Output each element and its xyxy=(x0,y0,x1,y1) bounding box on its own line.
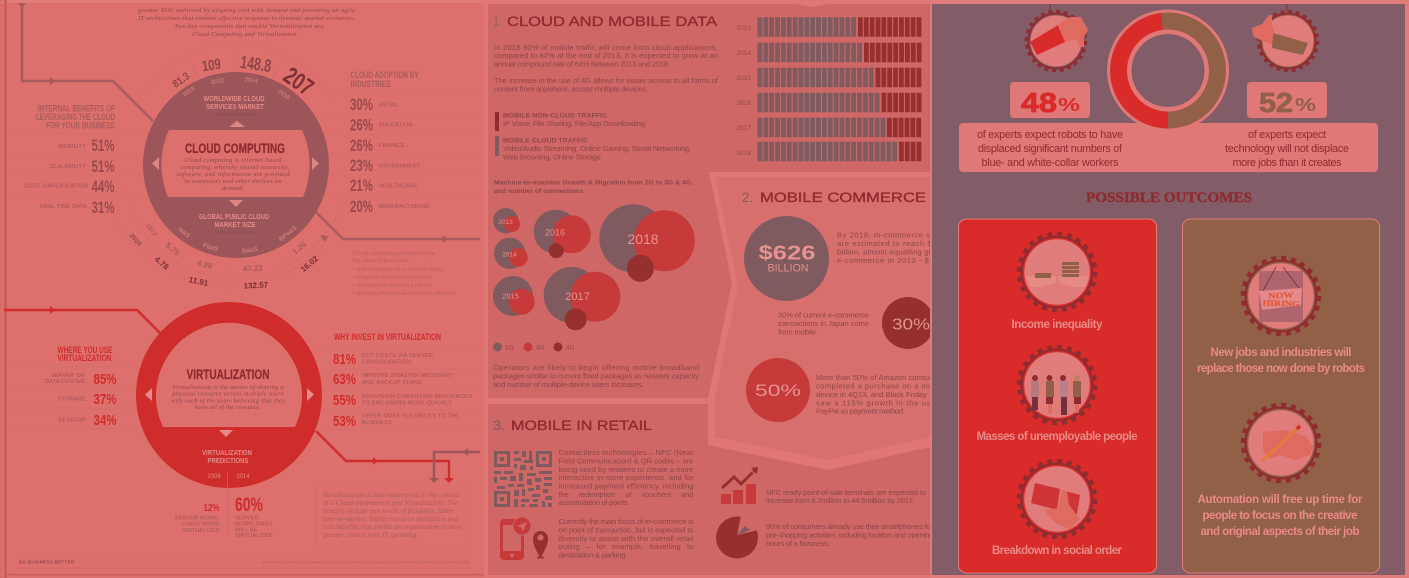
note: support functions: key support functions: xyxy=(352,257,410,264)
note: support functions: Cloud computing facilitates four xyxy=(352,250,436,257)
connector arrow: grey line to note xyxy=(429,448,480,483)
legend: network generations: 2G xyxy=(505,344,514,352)
text: amazon consumers: device in 4Q13, and Black Friday 2013 xyxy=(816,390,946,399)
market size values by service: 2013 xyxy=(144,223,158,238)
legend: network generations xyxy=(493,342,575,352)
text: amazon consumers: completed a purchase on a mobile xyxy=(816,382,946,390)
heading: mobile commerce: MOBILE COMMERCE xyxy=(760,189,926,205)
callout: variabilization note: of a Cloud environment and Virtualization. The xyxy=(323,500,458,507)
text: smartphones: 90% of consumers already use their smartphones for xyxy=(766,522,933,531)
panel: where you use virtualization: 34% xyxy=(94,412,116,429)
text: amazon consumers: PayPal as payment method. xyxy=(816,406,905,416)
callout: variabilization note: benefits include new levels of flexibility, faster xyxy=(323,508,454,515)
panel: why invest in virtualization: 55% xyxy=(333,392,356,409)
note: support functions: • Business Process-as-a-service (BPaaS) xyxy=(353,290,455,297)
panel: cloud adoption by industries: 26% xyxy=(350,136,373,155)
legend: network generations: 3G xyxy=(536,344,545,352)
callout: variabilization note: Variabilization is best understood in the context xyxy=(323,492,460,499)
panel: cloud adoption by industries: 21% xyxy=(350,176,373,195)
market size values by service: SaaS xyxy=(241,246,259,255)
panel: cloud adoption by industries xyxy=(322,70,480,216)
panel: cloud adoption by industries: HEALTHCARE xyxy=(379,184,418,190)
label: automation: and original aspects of their job xyxy=(1200,526,1360,538)
label: automation: people to focus on the creative xyxy=(1202,510,1358,522)
text: amazon consumers: More than 50% of Amazon consumers xyxy=(816,373,946,382)
stat: 30% xyxy=(882,297,934,349)
market size values by service: 16.02 xyxy=(299,254,320,274)
panel: cloud adoption by industries: CLOUD ADOPTION BY xyxy=(350,70,418,80)
stat: 48% xyxy=(1010,82,1090,118)
connector arrow: into virtualization circle xyxy=(4,306,160,333)
market size values by service: 5.75 xyxy=(164,241,182,258)
label: masses of unemployable people: Masses of unemployable people xyxy=(976,431,1138,443)
icon: rising bars xyxy=(721,467,758,504)
market size values by service: IaaS xyxy=(177,226,192,240)
icon: qr code xyxy=(494,451,552,507)
bubble chart: connections: 2018 xyxy=(627,231,659,247)
text: japan e-commerce xyxy=(778,310,869,336)
heading: cloud computing: CLOUD COMPUTING xyxy=(185,140,285,156)
virtualization description: with each of the users believing that they xyxy=(171,398,285,404)
virtualization predictions: SERVER WORK- xyxy=(175,516,220,522)
market size values by service: 2020 xyxy=(128,232,143,248)
panel: where you use virtualization: 85% xyxy=(94,371,116,388)
panel: positive outcomes xyxy=(1182,219,1380,573)
text: robots will displace xyxy=(977,129,1123,169)
heading: cloud and mobile data: CLOUD AND MOBILE DATA xyxy=(507,13,718,29)
text: amazon consumers: saw a 115% growth in the use of xyxy=(816,398,947,408)
market values by year: 2010 xyxy=(182,86,197,98)
panel: cloud adoption by industries: 20% xyxy=(350,197,373,216)
market size values by service: 4.38 xyxy=(196,258,214,271)
note: support functions: • Platform-as-a-service (PaaS) xyxy=(353,274,431,281)
panel: negative outcomes xyxy=(958,219,1156,573)
virtualization description: physical resource across multiple users xyxy=(172,390,284,398)
worldwide market label xyxy=(204,94,265,116)
label: automation: Automation will free up time for xyxy=(1198,494,1363,506)
body text: compared to 82% at the end of 2013. It is expected to grow at an xyxy=(494,51,718,60)
intro text xyxy=(137,7,355,38)
note: support functions: • Infrastructure-as-a-service (IaaS) xyxy=(353,266,444,273)
global market label xyxy=(199,212,269,234)
middle column backdrop xyxy=(484,0,930,578)
legend: traffic types xyxy=(495,112,691,162)
icon: now hiring sign: NOW xyxy=(1268,290,1294,301)
callout: variabilization note: time-to-market, higher resource utilization and xyxy=(323,516,459,523)
worldwide market label: SERVICES MARKET xyxy=(206,102,264,111)
text: m-commerce forecast: e-commerce in 2013 - $538. xyxy=(837,256,946,265)
operators text: packages similar to current fixed packages as network capacity xyxy=(493,372,699,380)
bubble chart: connections: 2014 xyxy=(502,252,517,258)
text: robots will displace: blue- and white-collar workers xyxy=(982,157,1119,169)
heading: machine-to-machine: and number of connections. xyxy=(494,188,585,195)
market size values by service: PaaS xyxy=(202,242,220,253)
panel: cloud adoption by industries: INDUSTRIES xyxy=(350,79,390,89)
operators text: Operators are likely to begin offering mobile broadband xyxy=(493,363,699,372)
icon: hand writing with pencil xyxy=(1243,405,1319,481)
stat: 52%: 52 xyxy=(1259,87,1293,118)
market size values by service: 47.22 xyxy=(243,263,264,274)
panel: why invest in virtualization: WHY INVEST IN VIRTUALIZATION xyxy=(334,332,441,342)
connector arrow: virtualization to note xyxy=(316,431,454,483)
cloud computing description: to computers and other devices on xyxy=(184,178,282,185)
virtualization predictions: SERVER xyxy=(235,516,259,522)
bar chart: mobile traffic by year: 2017 xyxy=(737,125,751,132)
text: technology will not displace xyxy=(1225,129,1349,169)
text: japan e-commerce: from mobile. xyxy=(778,328,818,336)
heading: machine-to-machine: Machine-to-machine Growth & Migration from 2G to 3G & 4G, xyxy=(494,180,693,186)
text: smartphones: hours of a business. xyxy=(766,539,830,548)
text: contactless technologies: Contactless technologies – NFC (Near xyxy=(558,448,694,457)
global market label: GLOBAL PUBLIC CLOUD xyxy=(199,212,269,221)
panel: mobile in retail xyxy=(493,417,933,560)
market size values by service: 4.78 xyxy=(153,255,171,272)
text: nfc terminals: increase from 6.7million to 44.5million by 2017. xyxy=(766,496,915,505)
icon: now hiring sign: HIRING xyxy=(1262,298,1300,309)
panel: where you use virtualization: 37% xyxy=(94,391,116,408)
cloud computing description: demand. xyxy=(222,185,244,192)
stat: $626 billion: BILLION xyxy=(768,262,809,274)
market values by year: 2012 xyxy=(211,78,226,86)
panel: why invest in virtualization: OFFER MORE FLEXIBILITY TO THE xyxy=(362,414,459,420)
label: breakdown in social order: Breakdown in social order xyxy=(992,545,1123,557)
panel: why invest in virtualization: PROVISION COMPUTING RESOURCES xyxy=(362,394,472,400)
text: smartphones xyxy=(766,522,933,548)
panel: why invest in virtualization: TO END USERS MORE QUICKLY xyxy=(362,400,452,406)
text: robots will displace: of experts expect robots to have xyxy=(977,129,1123,141)
global market label: UNITS IN USD BILLIONS xyxy=(215,230,256,234)
market values by year: 148.8 xyxy=(239,52,273,76)
bar chart: mobile traffic by year: 2015 xyxy=(737,75,751,82)
panel: why invest in virtualization: 63% xyxy=(333,371,356,388)
text: contactless technologies: Field Communication) & QR codes – are xyxy=(558,456,694,466)
stat: 48%: 48 xyxy=(1021,87,1057,118)
panel: internal benefits of cloud: INTERNAL BENEFITS OF xyxy=(38,104,115,114)
bubble chart: connections: 2013 xyxy=(498,219,513,226)
virtualization description: have all of the resource. xyxy=(195,404,261,411)
panel: internal benefits of cloud: LEVERAGING THE CLOUD xyxy=(36,112,115,122)
text: m-commerce forecast: are estimated to reach $626 xyxy=(837,239,946,248)
virtualization predictions: WORKLOADS xyxy=(235,522,273,528)
callout: variabilization note: cost benefits that enable an organization to have xyxy=(323,524,462,531)
text: m-commerce forecast xyxy=(837,230,946,265)
virtualization predictions: VIRTUALIZATION xyxy=(202,448,252,457)
legend: network generations: 4G xyxy=(566,344,575,352)
market size values by service: 11.91 xyxy=(188,275,210,288)
connector arrow: cloud circle to right xyxy=(316,212,480,243)
market values by year: 207 xyxy=(278,62,318,102)
panel: internal benefits of cloud: SCALABILITY xyxy=(49,164,86,170)
heading: virtualization: VIRTUALIZATION xyxy=(186,366,270,382)
connector arrow: top into cloud circle xyxy=(18,3,153,121)
footer: DO BUSINESS BETTER xyxy=(19,560,75,564)
panel: internal benefits of cloud: REAL TIME DATA xyxy=(40,204,87,210)
panel: where you use virtualization: SERVER OR xyxy=(51,373,85,379)
panel: cloud adoption by industries: 23% xyxy=(350,156,373,175)
legend: traffic types: MOBILE CLOUD TRAFFIC xyxy=(503,138,588,144)
virtualization predictions xyxy=(175,448,273,539)
icon: thumbs up gear xyxy=(1252,4,1318,70)
panel: internal benefits of cloud: 51% xyxy=(92,157,114,176)
panel: where you use virtualization xyxy=(8,345,145,429)
stat: 50%: 50% xyxy=(755,381,801,400)
virtualization predictions: 12% xyxy=(204,503,220,514)
market values by year: 2014 xyxy=(244,77,259,85)
market size values by service: 132.57 xyxy=(243,280,269,291)
panel: virtualization wheel xyxy=(136,302,322,539)
bar chart: mobile traffic by year xyxy=(737,25,922,157)
panel: cloud adoption by industries: RETAIL xyxy=(379,102,399,108)
virtualization predictions: 2014 xyxy=(236,474,250,480)
body text xyxy=(494,43,719,94)
market size values by service: 1.26 xyxy=(291,239,309,257)
virtualization predictions: VIRTUALIZED xyxy=(235,533,273,539)
body text: content from anywhere, across multiple devices. xyxy=(494,84,648,94)
icon: line of people xyxy=(1019,347,1095,423)
label: automation xyxy=(1198,494,1363,538)
panel: why invest in virtualization: 81% xyxy=(333,351,356,368)
virtualization description xyxy=(171,384,285,411)
market size values by service: BPaaS xyxy=(278,224,299,243)
panel: cloud adoption by industries: FINANCE xyxy=(379,143,405,149)
body text: The increase in the use of 4G allows for easier access to all forms of xyxy=(494,76,719,85)
stat: $626 billion: $626 xyxy=(758,242,816,264)
text: contactless technologies: interactive in-store experience, and for xyxy=(558,473,694,482)
text: contactless technologies: accumulation of points. xyxy=(558,498,630,507)
panel: why invest in virtualization: CONSOLIDATION xyxy=(362,360,411,366)
panel: internal benefits of cloud: 31% xyxy=(92,198,114,217)
legend: traffic types: Web Browsing, Online Storage xyxy=(503,152,601,162)
heading: mobile in retail: 3. xyxy=(493,417,505,433)
market size values by service xyxy=(128,223,328,291)
donut chart: 48 / 52 xyxy=(1107,10,1229,132)
icon: thumbs down gear xyxy=(1026,4,1088,70)
icon: hand with cash xyxy=(1019,461,1095,537)
panel: why invest in virtualization xyxy=(312,332,480,430)
panel: internal benefits of cloud: FOR YOUR BUSINESS xyxy=(46,120,115,130)
label: new jobs: New jobs and industries will xyxy=(1210,347,1352,359)
worldwide market label: WORLDWIDE CLOUD xyxy=(204,94,265,103)
text: smartphones: pre-shopping activities, including location and opening xyxy=(766,530,933,540)
callout: variabilization note xyxy=(316,485,470,545)
bubble chart: connections: 2017 xyxy=(565,291,590,303)
panel: cloud adoption by industries: MANUFACTURING xyxy=(379,204,430,210)
panel: internal benefits of cloud: 44% xyxy=(92,177,114,196)
heading: machine-to-machine xyxy=(494,180,693,195)
panel: why invest in virtualization: BUSINESS xyxy=(362,420,392,426)
panel: where you use virtualization: DATA CENTER xyxy=(45,379,85,385)
text: nfc terminals xyxy=(766,488,926,505)
icon: now hiring sign xyxy=(1243,258,1319,334)
bubble chart: connections: 2016 xyxy=(545,228,565,238)
icon: phone and location xyxy=(500,517,548,560)
panel: cloud adoption by industries: 30% xyxy=(350,95,373,114)
note: support functions xyxy=(352,250,455,297)
panel: where you use virtualization: DESKTOP xyxy=(58,418,86,424)
panel: cloud adoption by industries: GOVERNMENT xyxy=(379,164,421,170)
panel: cloud and mobile data xyxy=(488,4,930,398)
heading: possible outcomes: POSSIBLE OUTCOMES xyxy=(1086,190,1252,206)
virtualization predictions: WILL BE xyxy=(235,528,258,534)
bubble chart: connections: 2015 xyxy=(502,292,519,300)
panel: internal benefits of cloud: 51% xyxy=(92,136,114,155)
heading: cloud and mobile data: 1. xyxy=(494,13,500,29)
intro text: greater ROI, achieved by aligning cost with demand and providing an agile xyxy=(138,7,355,14)
text: m-commerce forecast: By 2018, m-commerce sales xyxy=(837,230,946,240)
text: contactless technologies: increased payment efficiency, including xyxy=(558,482,694,490)
panel: where you use virtualization: VIRTUALIZATION xyxy=(58,353,112,363)
stat: $626 billion xyxy=(744,216,829,301)
text: focus of m-commerce: destination & parking. xyxy=(558,550,628,560)
note: support functions: • Software-as-a-service (SaaS) xyxy=(353,282,432,289)
market values by year xyxy=(170,52,318,102)
text: m-commerce forecast: billion, almost equalling global xyxy=(837,248,946,256)
text: nfc terminals: NFC ready point-of-sale terminals are expected to xyxy=(766,488,926,497)
body text: annual compound rate of 64% between 2013 and 2018. xyxy=(494,60,670,68)
label: new jobs xyxy=(1197,347,1365,375)
panel: where you use virtualization: STORAGE xyxy=(58,396,86,402)
cloud computing description: software, and information are provided xyxy=(176,171,290,178)
panel: cloud adoption by industries: EDUCATION xyxy=(379,122,413,128)
virtualization predictions: LOADS WERE xyxy=(181,522,220,528)
panel: where you use virtualization: WHERE YOU USE xyxy=(58,345,112,355)
panel: cloud adoption by industries: 26% xyxy=(350,116,373,134)
panel: internal benefits of cloud: MOBILITY xyxy=(59,144,86,150)
market values by year: 81.3 xyxy=(170,70,192,91)
intro text: Two key components that enable Variabilization are xyxy=(174,23,324,30)
text: technology will not displace: technology will not displace xyxy=(1225,143,1349,155)
footer xyxy=(17,555,471,568)
legend: traffic types: MOBILE NON-CLOUD TRAFFIC xyxy=(503,112,607,120)
stat: 52% xyxy=(1247,82,1327,118)
global market label: MARKET SIZE xyxy=(214,220,256,229)
text: focus of m-commerce: on point of transaction, but is expected to xyxy=(558,526,694,534)
virtualization predictions: 60% xyxy=(235,495,263,516)
icon: income inequality xyxy=(1019,234,1095,310)
text: focus of m-commerce: outing – for example, travelling to xyxy=(558,542,694,551)
bar chart: mobile traffic by year: 2016 xyxy=(737,100,751,107)
text: contactless technologies xyxy=(558,448,694,507)
label: income inequality: Income inequality xyxy=(1012,319,1103,331)
virtualization predictions: VIRTUALIZED xyxy=(182,528,220,534)
description box xyxy=(959,123,1378,172)
bubble chart: connections xyxy=(493,204,695,330)
bar chart: mobile traffic by year: 2013 xyxy=(737,25,751,32)
operators text xyxy=(493,363,699,389)
panel: why invest in virtualization: AND BACKUP PLANS xyxy=(362,380,422,386)
operators text: and number of multiple-device users increases. xyxy=(493,380,644,389)
intro text: IT architecture that enables effective response to dynamic market scenarios. xyxy=(137,15,355,22)
footer: MYDEVOPS | OVER 120,000 EMPLOYEES | 34 COUNTRIES | CONSULTING | SYSTEM INTEGRATION | OUTSOURCING xyxy=(262,560,470,564)
callout: variabilization note: greater control over IT spending. xyxy=(323,532,418,539)
panel: robots and jobs xyxy=(932,4,1405,575)
text: japan e-commerce: transactions in Japan come xyxy=(778,319,869,328)
stat: 52%: % xyxy=(1295,95,1316,115)
heading: mobile commerce: 2. xyxy=(742,189,753,205)
text: japan e-commerce: 30% of current e-commerce xyxy=(778,310,869,320)
virtualization predictions: 2008 xyxy=(207,474,221,480)
virtualization description: Virtualization is the means of sharing a xyxy=(172,384,284,391)
market values by year: 109 xyxy=(201,56,222,75)
cloud computing description: computing, whereby shared resources, xyxy=(180,164,290,171)
text: contactless technologies: the redemption of vouchers and xyxy=(558,490,694,499)
worldwide market label: UNITS IN USD BILLIONS xyxy=(215,112,256,116)
cloud computing description xyxy=(176,157,290,192)
bar chart: mobile traffic by year: 2018 xyxy=(737,150,751,157)
legend: traffic types: Video/Audio Streaming, Online Gaming, Social Networking, xyxy=(503,144,691,153)
heading: mobile in retail: MOBILE IN RETAIL xyxy=(511,417,652,433)
panel: internal benefits of cloud: COST SIMPLIFICATION xyxy=(24,184,88,190)
text: technology will not displace: of experts expect xyxy=(1248,129,1326,141)
text: amazon consumers xyxy=(816,373,947,416)
panel: internal benefits of cloud xyxy=(8,104,143,217)
right column frame xyxy=(930,0,1409,578)
intro text: Cloud Computing and Virtualization. xyxy=(192,31,298,38)
stat: 50% xyxy=(746,358,810,422)
label: new jobs: replace those now done by robots xyxy=(1197,363,1365,375)
icon: pie chart 90% xyxy=(716,515,760,558)
body text: In 2018 90% of mobile traffic will come from cloud applications, xyxy=(494,43,718,52)
text: technology will not displace: more jobs than it creates xyxy=(1232,157,1342,169)
text: focus of m-commerce: diversify to assist with the overall retail xyxy=(558,534,694,543)
virtualization predictions: PREDICTIONS xyxy=(208,456,248,465)
panel: why invest in virtualization: CUT COSTS VIA SERVER xyxy=(362,353,433,359)
panel: why invest in virtualization: 53% xyxy=(333,413,356,430)
stat: 48%: % xyxy=(1058,95,1080,115)
text: focus of m-commerce: Currently the main focus of m-commerce is xyxy=(558,517,694,526)
legend: traffic types: IP Voice, File Sharing, File/App Downloading xyxy=(503,119,645,128)
panel: why invest in virtualization: IMPROVE DISASTER RECOVERY xyxy=(362,373,453,379)
bar chart: mobile traffic by year: 2014 xyxy=(737,50,751,57)
text: contactless technologies: being used by retailers to create a more xyxy=(558,465,694,474)
market values by year: 2016 xyxy=(276,89,291,102)
panel: mobile commerce xyxy=(488,177,947,575)
text: focus of m-commerce xyxy=(558,517,694,560)
stat: 30%: 30% xyxy=(892,316,930,334)
text: robots will displace: displaced significant numbers of xyxy=(978,143,1123,155)
panel: cloud computing wheel xyxy=(115,43,343,291)
cloud computing description: Cloud computing is internet-based xyxy=(184,157,282,164)
